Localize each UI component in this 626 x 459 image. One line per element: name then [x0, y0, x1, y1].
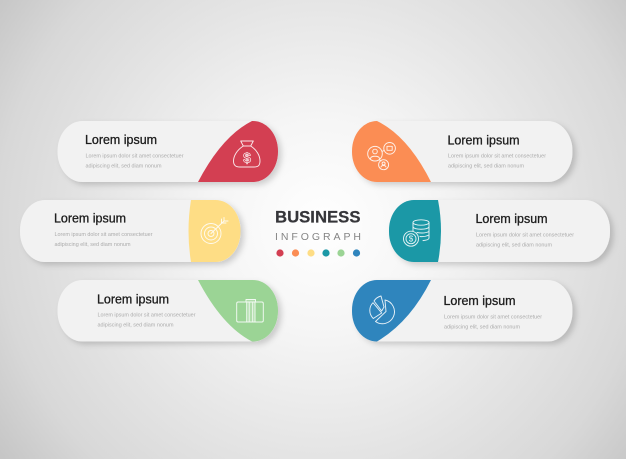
icon: coins [404, 220, 429, 246]
description: card 1 [86, 153, 184, 169]
icon: target [201, 218, 228, 244]
icon: briefcase [237, 300, 263, 322]
description: card 2 [448, 154, 546, 170]
description: card 4 [476, 233, 574, 249]
description: card 5 [98, 313, 196, 329]
panel: briefcase card [58, 275, 285, 345]
heading: card 3: Lorem ipsum [54, 211, 126, 225]
icon: money bag [234, 141, 260, 167]
blue segment [352, 280, 431, 342]
yellow segment [188, 200, 245, 262]
description: card 3: adipiscing elit, sed diam nonum [54, 242, 131, 248]
description: card 3: Lorem ipsum dolor sit amet consectetuer [54, 232, 153, 238]
description: card 1: adipiscing elit, sed diam nonum [86, 163, 162, 169]
heading: card 5: Lorem ipsum [97, 292, 169, 306]
panel: money bag card [58, 121, 284, 188]
description: card 4: adipiscing elit, sed diam nonum [476, 243, 552, 249]
description: card 2: Lorem ipsum dolor sit amet consectetuer [448, 154, 546, 160]
panel: pie chart card [345, 275, 572, 345]
heading: card 4: Lorem ipsum [476, 212, 548, 226]
description: card 5: Lorem ipsum dolor sit amet consectetuer [98, 313, 196, 319]
description: card 6: adipiscing elit, sed diam nonum [444, 324, 520, 330]
color dots [276, 249, 360, 257]
icon: money bag: $ [243, 150, 251, 166]
icon: people network [368, 142, 395, 170]
heading: business: BUSINESS [275, 207, 360, 226]
teal segment [385, 200, 441, 262]
heading: card 6: Lorem ipsum [444, 294, 516, 308]
heading: card 2: Lorem ipsum [448, 134, 520, 148]
title block [275, 207, 361, 257]
panel: coins card [385, 200, 610, 262]
description: card 6: Lorem ipsum dolor sit amet consectetuer [444, 314, 542, 320]
panel: target card [20, 200, 245, 262]
description: card 1: Lorem ipsum dolor sit amet consectetuer [86, 153, 184, 159]
description: card 6 [444, 314, 542, 330]
red segment [198, 121, 278, 182]
green segment [198, 280, 278, 342]
panel: network card [352, 121, 578, 188]
description: card 2: adipiscing elit, sed diam nonum [448, 164, 524, 170]
icon: pie chart [370, 296, 394, 324]
heading: card 1: Lorem ipsum [85, 133, 157, 147]
description: card 5: adipiscing elit, sed diam nonum [98, 323, 174, 329]
description: card 3 [54, 232, 153, 248]
orange segment [352, 121, 431, 182]
description: card 4: Lorem ipsum dolor sit amet consectetuer [476, 233, 574, 239]
icon: coins: $ [409, 234, 414, 244]
subheading: infograph: INFOGRAPH [275, 231, 361, 243]
